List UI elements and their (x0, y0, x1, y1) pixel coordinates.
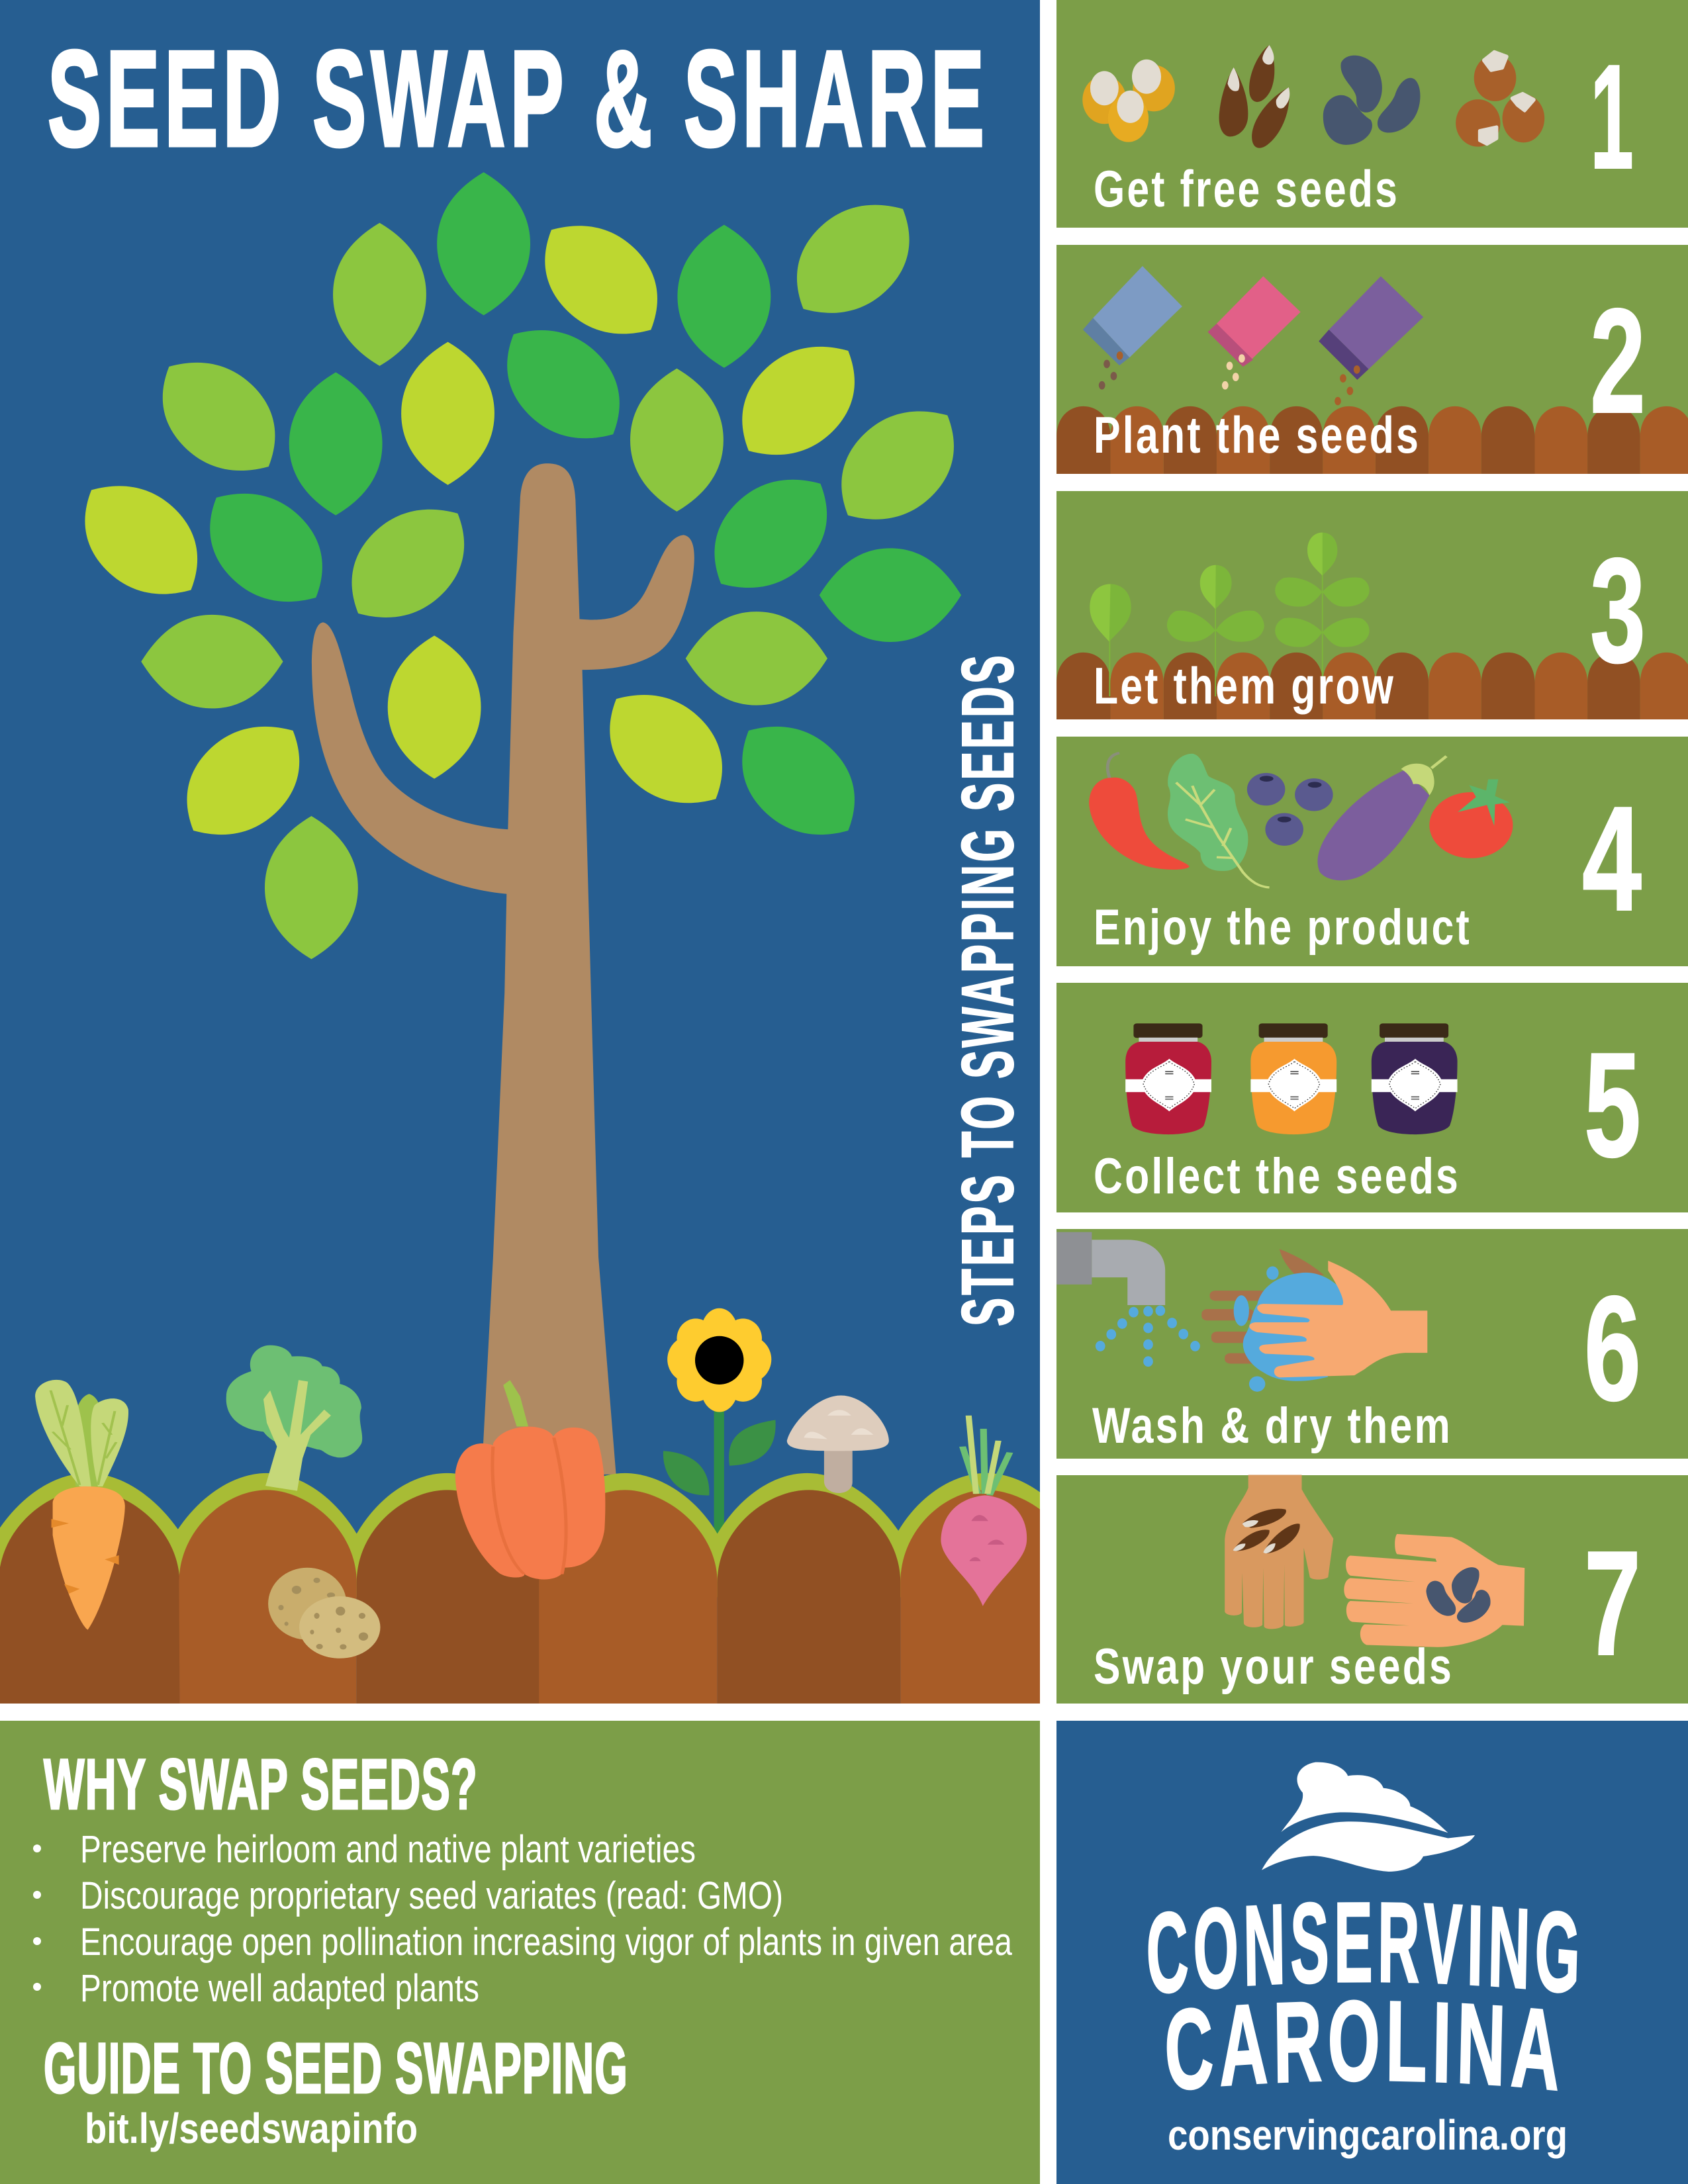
hazelnuts (1456, 52, 1544, 147)
icons: tap and hands (1056, 1232, 1427, 1392)
right hand with dark beans (1344, 1534, 1524, 1647)
icons: seeds (1082, 45, 1544, 148)
chili pepper (1089, 753, 1190, 870)
blue packet (1083, 266, 1182, 390)
icon: leaf logo (1262, 1762, 1475, 1872)
tall seedling (1275, 533, 1370, 696)
panel: step 1 get free seeds (1056, 0, 1688, 228)
website: conservingcarolina.org (1168, 2111, 1568, 2159)
panel: tree scene (0, 0, 1101, 1704)
panel: step 5 collect the seeds (1056, 983, 1688, 1212)
step number: 1 (1590, 33, 1634, 200)
soil hills (0, 1473, 1101, 1704)
panel: step 4 enjoy the product (1056, 737, 1688, 966)
guide link: bit.ly/seedswapinfo (85, 2105, 418, 2152)
blueberries (1247, 773, 1333, 846)
icons: hands with seeds (1225, 1475, 1524, 1647)
potatoes (268, 1568, 380, 1659)
title: SEED SWAP & SHARE (48, 23, 989, 175)
water tap (1056, 1232, 1165, 1305)
eggplant (1317, 756, 1446, 880)
icons: jars (1125, 1023, 1458, 1134)
broccoli (226, 1345, 362, 1491)
logo wordmark (1148, 1902, 1577, 2091)
panel: step 2 plant the seeds (1056, 245, 1688, 474)
corn kernels (1082, 60, 1175, 142)
leaves (57, 172, 982, 959)
step number: 7 (1584, 1520, 1641, 1686)
pink packet (1207, 276, 1301, 390)
orange jar (1250, 1023, 1336, 1134)
bullet list: Discourage proprietary seed variates (read: GMO) (80, 1874, 783, 1917)
brown seeds (1219, 45, 1289, 148)
mushroom (787, 1395, 889, 1493)
purple packet (1319, 276, 1423, 405)
side heading: STEPS TO SWAPPING SEEDS (947, 653, 1029, 1326)
dark beans (1323, 56, 1420, 145)
step number: 4 (1582, 775, 1642, 942)
small seedling (1090, 584, 1131, 696)
heading: why swap seeds: WHY SWAP SEEDS? (44, 1744, 478, 1824)
step label: Plant the seeds (1094, 406, 1421, 464)
purple jar (1372, 1023, 1458, 1134)
step number: 5 (1584, 1021, 1641, 1188)
tree (57, 172, 982, 1475)
step label: Swap your seeds (1094, 1639, 1454, 1695)
orange hand (1249, 1261, 1427, 1377)
step label: Let them grow (1094, 657, 1395, 715)
bullet list: Promote well adapted plants (80, 1967, 479, 2010)
bullet list: Encourage open pollination increasing vigor of plants in given area (80, 1921, 1013, 1964)
water drops (1096, 1305, 1200, 1367)
panel: why swap seeds (0, 1721, 1040, 2184)
step label: Collect the seeds (1094, 1148, 1460, 1205)
step label: Get free seeds (1094, 159, 1399, 218)
carolina: CAROLINA (1166, 2000, 1558, 2091)
step label: Enjoy the product (1094, 899, 1472, 956)
tomato (1429, 780, 1513, 858)
tree trunk (312, 463, 694, 1475)
left hand with brown seeds (1225, 1475, 1333, 1629)
icons: produce (1089, 753, 1513, 887)
carrot (35, 1380, 128, 1629)
beet (941, 1416, 1027, 1606)
soil arches (1056, 653, 1688, 720)
step number: 3 (1590, 527, 1646, 694)
conserving: CONSERVING (1148, 1902, 1577, 1993)
panel: step 6 wash and dry them (1056, 1229, 1688, 1459)
step label: Wash & dry them (1092, 1398, 1452, 1454)
sunflower (663, 1308, 776, 1534)
icons: seed packets (1083, 266, 1423, 405)
step number: 6 (1584, 1265, 1641, 1432)
panel: conserving carolina logo (1056, 1721, 1688, 2184)
pumpkin (455, 1380, 605, 1580)
chard leaf (1168, 754, 1270, 887)
garden scene (0, 1308, 1101, 1704)
icons: seedlings (1090, 533, 1370, 696)
soap suds (1234, 1266, 1346, 1392)
bullet list: Preserve heirloom and native plant varieties (80, 1828, 696, 1871)
soil arches (1056, 406, 1688, 474)
bullet list (33, 1828, 1013, 2010)
medium seedling (1167, 565, 1264, 696)
red jar (1125, 1023, 1211, 1134)
brown hand behind (1201, 1249, 1324, 1363)
panel: step 7 swap your seeds (1056, 1475, 1688, 1704)
step number: 2 (1590, 277, 1646, 444)
heading: guide to seed swapping: GUIDE TO SEED SWAPPING (44, 2028, 628, 2108)
panel: step 3 let them grow (1056, 491, 1688, 720)
